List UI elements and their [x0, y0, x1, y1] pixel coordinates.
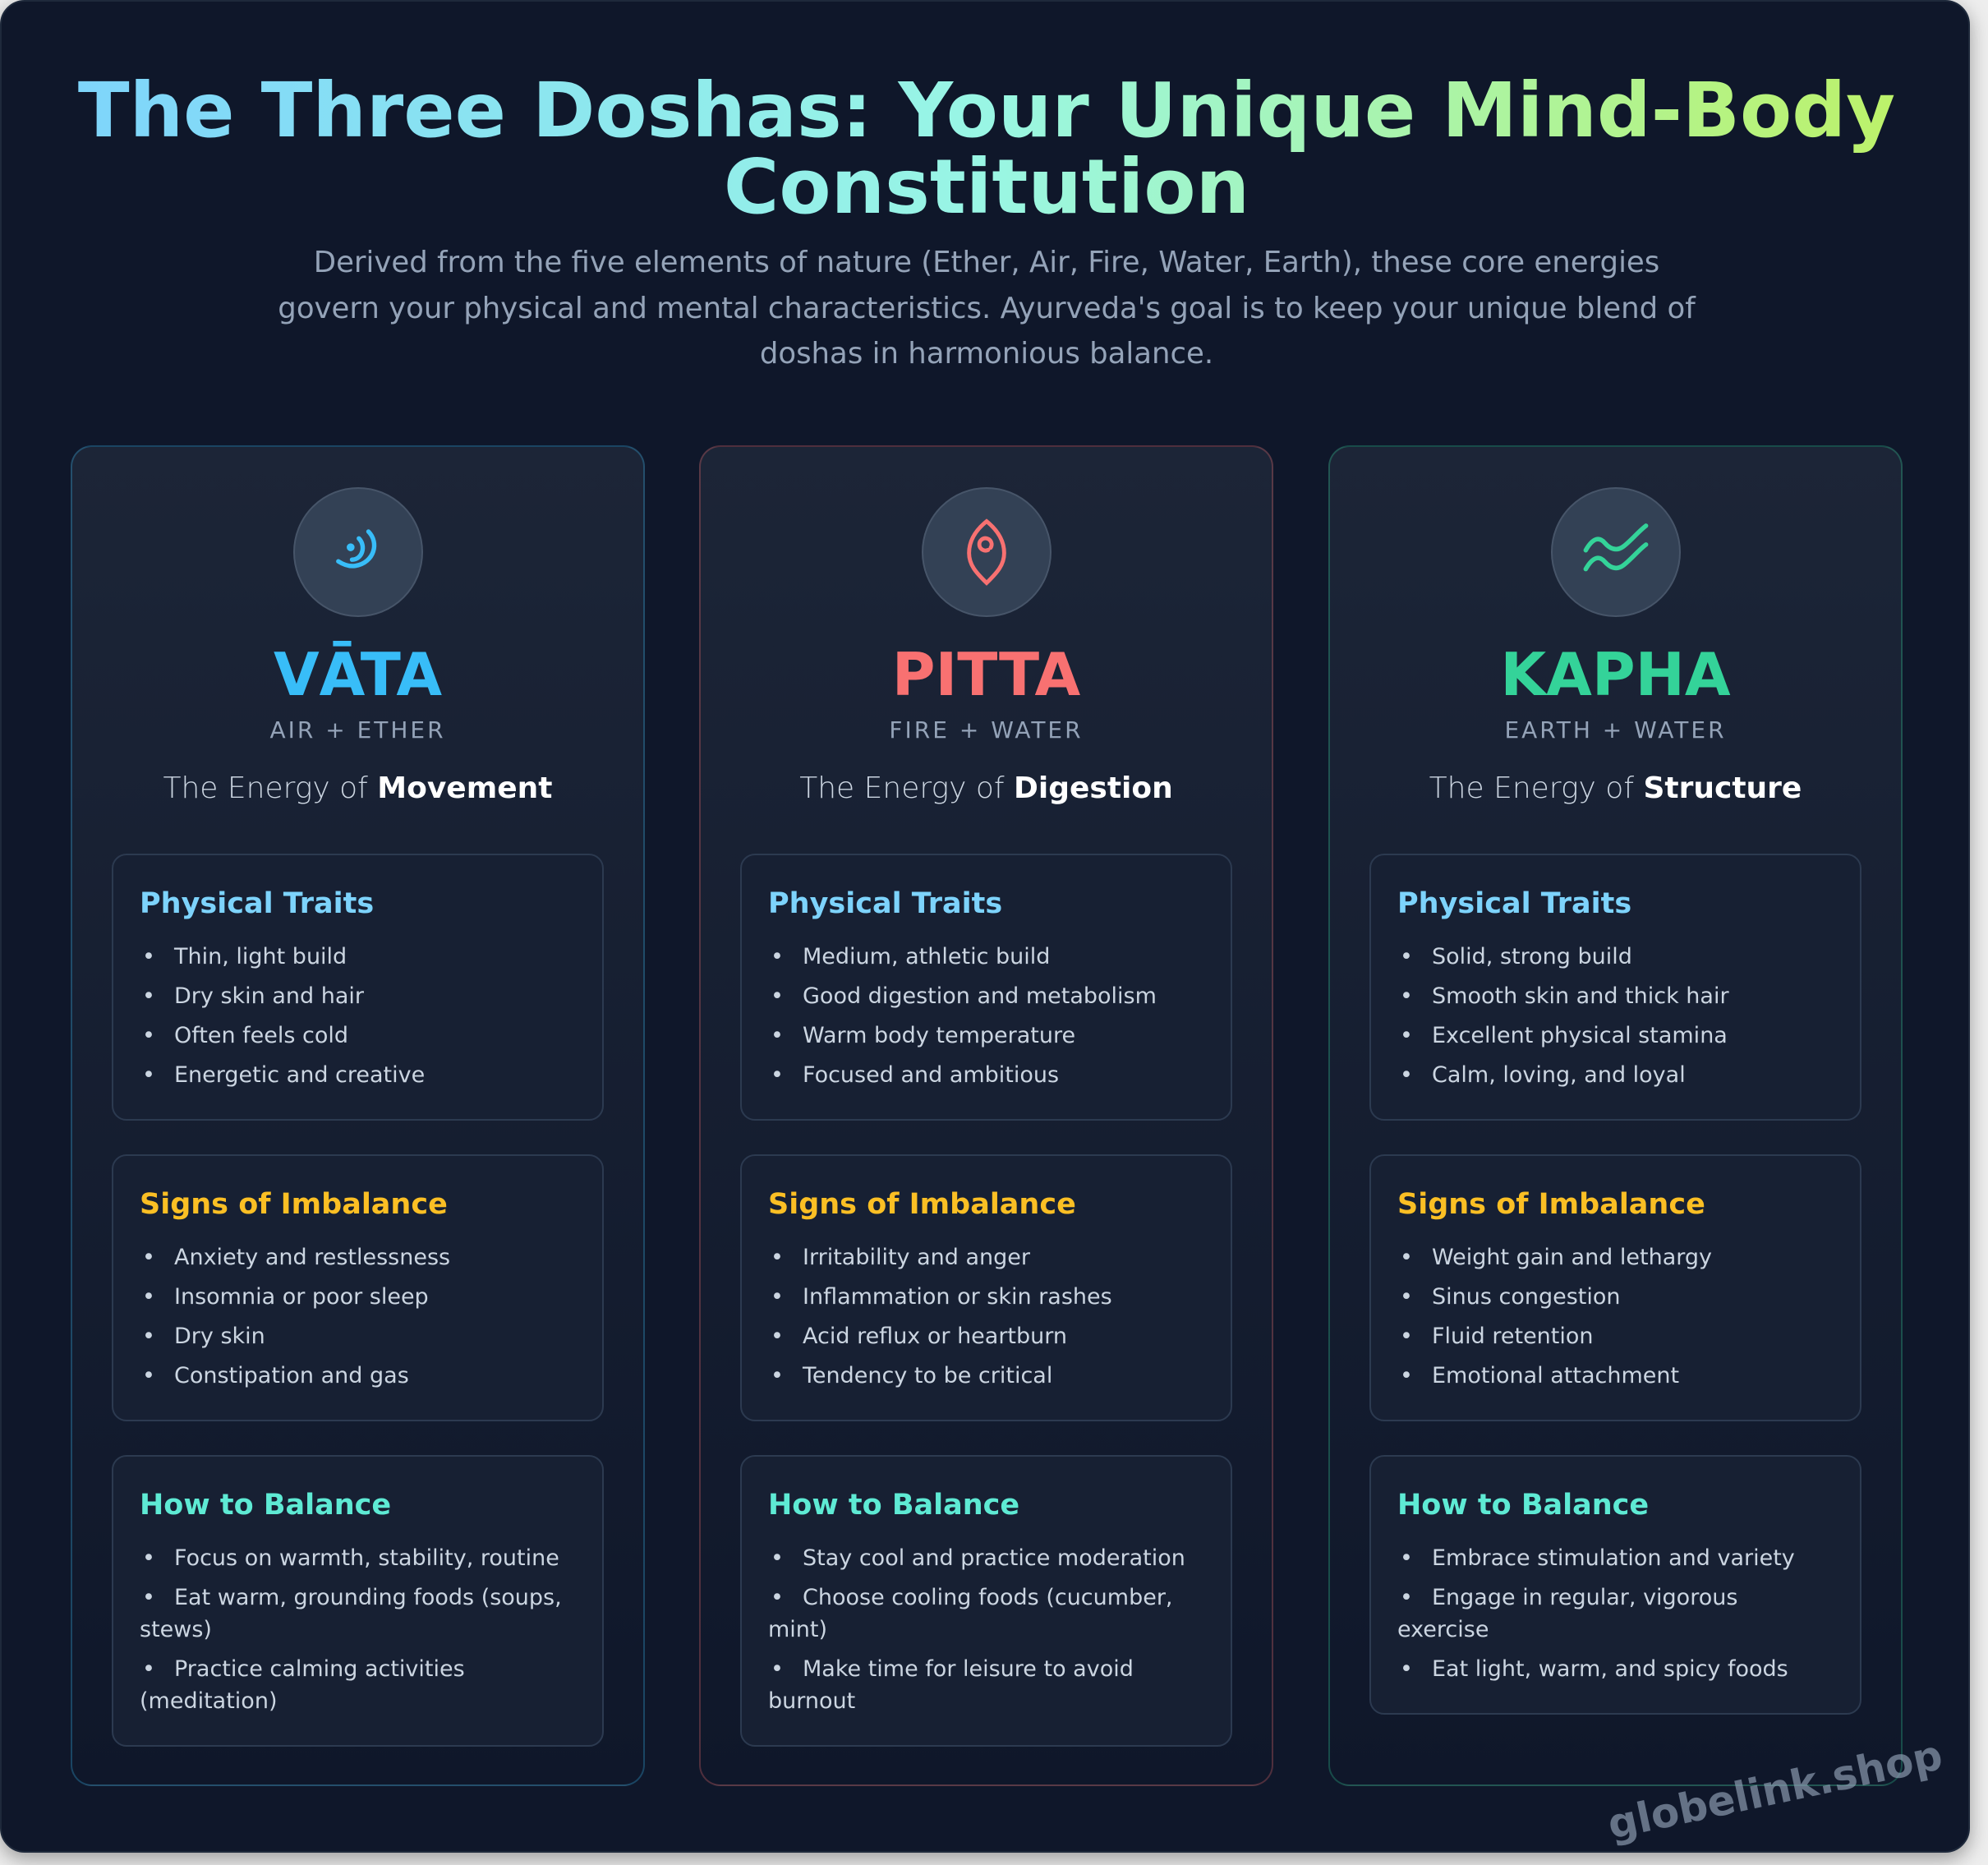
panel: pitta: [699, 445, 1273, 1786]
physical traits: Focused and ambitious: [803, 1062, 1059, 1088]
signs of imbalance: Irritability and anger: [803, 1245, 1030, 1270]
physical traits: Smooth skin and thick hair: [1432, 983, 1729, 1009]
heading: pitta: PITTA: [892, 640, 1080, 709]
signs of imbalance: Anxiety and restlessness: [174, 1245, 450, 1270]
how to balance: Embrace stimulation and variety: [1432, 1545, 1795, 1571]
tagline: The Energy of Digestion: [799, 771, 1173, 805]
elements: EARTH + WATER: [1504, 716, 1727, 744]
icon: flame: [922, 487, 1052, 617]
how to balance: How to Balance: [768, 1489, 1019, 1522]
how to balance: Eat warm, grounding foods (soups, stews): [140, 1585, 562, 1642]
physical traits: Energetic and creative: [174, 1062, 425, 1088]
signs of imbalance: Acid reflux or heartburn: [803, 1324, 1067, 1349]
subtitle: Derived from the five elements of nature (Ether, Air, Fire, Water, Earth), these core energies govern your physical and mental characteristics. Ayurveda's goal is to keep your unique blend of doshas in harmonious balance.: [278, 246, 1696, 371]
panel: vata: [71, 445, 645, 1786]
tagline: The Energy of Structure: [1429, 771, 1802, 805]
panel: kapha: [1328, 445, 1903, 1786]
how to balance: Choose cooling foods (cucumber, mint): [768, 1585, 1173, 1642]
signs of imbalance: Tendency to be critical: [803, 1363, 1052, 1388]
signs of imbalance: Fluid retention: [1432, 1324, 1594, 1349]
elements: AIR + ETHER: [269, 716, 446, 744]
physical traits: [740, 854, 1232, 1121]
physical traits: Physical Traits: [1397, 887, 1631, 920]
signs of imbalance: Dry skin: [174, 1324, 265, 1349]
how to balance: Engage in regular, vigorous exercise: [1397, 1585, 1737, 1642]
how to balance: [1369, 1455, 1861, 1715]
signs of imbalance: Emotional attachment: [1432, 1363, 1679, 1388]
physical traits: Warm body temperature: [803, 1023, 1075, 1048]
signs of imbalance: Sinus congestion: [1432, 1284, 1621, 1310]
physical traits: Solid, strong build: [1432, 944, 1632, 969]
physical traits: Physical Traits: [140, 887, 374, 920]
physical traits: Good digestion and metabolism: [803, 983, 1157, 1009]
how to balance: [112, 1455, 604, 1747]
signs of imbalance: Signs of Imbalance: [768, 1188, 1076, 1221]
signs of imbalance: Signs of Imbalance: [140, 1188, 448, 1221]
how to balance: Focus on warmth, stability, routine: [174, 1545, 559, 1571]
signs of imbalance: [1369, 1154, 1861, 1421]
icon: waves: [1551, 487, 1681, 617]
signs of imbalance: Inflammation or skin rashes: [803, 1284, 1112, 1310]
physical traits: Medium, athletic build: [803, 944, 1050, 969]
signs of imbalance: Weight gain and lethargy: [1432, 1245, 1712, 1270]
heading: kapha: KAPHA: [1500, 640, 1731, 709]
physical traits: Dry skin and hair: [174, 983, 364, 1009]
physical traits: Thin, light build: [174, 944, 347, 969]
how to balance: Eat light, warm, and spicy foods: [1432, 1656, 1788, 1682]
signs of imbalance: Constipation and gas: [174, 1363, 409, 1388]
heading: vata: VĀTA: [274, 640, 442, 709]
how to balance: How to Balance: [1397, 1489, 1649, 1522]
watermark: globelink.shop: [1604, 1731, 1947, 1849]
signs of imbalance: [112, 1154, 604, 1421]
physical traits: Excellent physical stamina: [1432, 1023, 1728, 1048]
signs of imbalance: Signs of Imbalance: [1397, 1188, 1705, 1221]
physical traits: Often feels cold: [174, 1023, 348, 1048]
physical traits: Physical Traits: [768, 887, 1002, 920]
title: The Three Doshas: Your Unique Mind-Body Constitution: [78, 67, 1895, 231]
physical traits: [112, 854, 604, 1121]
physical traits: [1369, 854, 1861, 1121]
how to balance: [740, 1455, 1232, 1747]
signs of imbalance: [740, 1154, 1232, 1421]
tagline: The Energy of Movement: [163, 771, 552, 805]
how to balance: How to Balance: [140, 1489, 391, 1522]
physical traits: Calm, loving, and loyal: [1432, 1062, 1686, 1088]
how to balance: Practice calming activities (meditation): [140, 1656, 465, 1714]
elements: FIRE + WATER: [889, 716, 1084, 744]
signs of imbalance: Insomnia or poor sleep: [174, 1284, 429, 1310]
icon: wind: [292, 487, 422, 617]
how to balance: Make time for leisure to avoid burnout: [768, 1656, 1134, 1714]
how to balance: Stay cool and practice moderation: [803, 1545, 1185, 1571]
